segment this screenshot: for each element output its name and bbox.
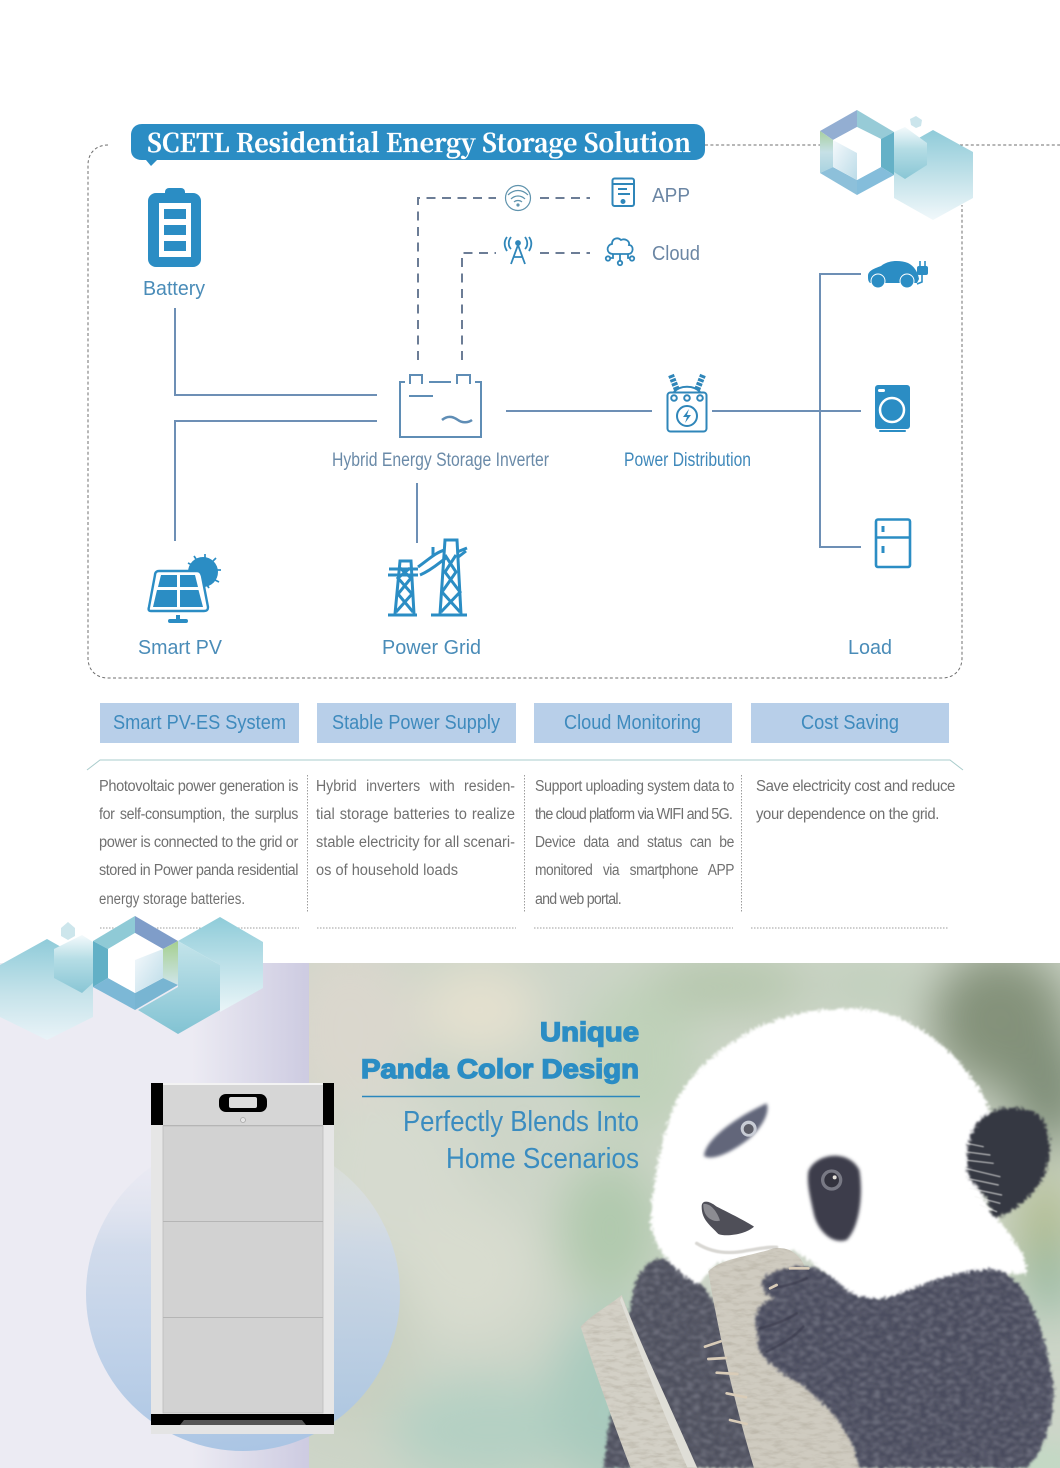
text block: smart pv-es system: energy storage batteries. bbox=[99, 891, 245, 908]
text block: cost saving: your dependence on the grid. bbox=[756, 806, 939, 823]
section dotted rules bbox=[100, 775, 949, 928]
panda ear bbox=[967, 1108, 1050, 1218]
icon: cloud bbox=[606, 238, 634, 265]
label: power distribution: Power Distribution bbox=[624, 450, 751, 471]
product: battery cabinet bbox=[151, 1083, 334, 1434]
paw finger lines bbox=[760, 1278, 807, 1352]
hexagon cluster: lower left bbox=[0, 916, 263, 1040]
feature tab: smart pv-es system bbox=[100, 703, 299, 743]
icon: battery bbox=[148, 188, 201, 267]
feature tab: stable power supply: Stable Power Supply bbox=[332, 712, 500, 734]
title banner: SCETL Residential Energy Storage Solution bbox=[147, 124, 691, 160]
icon: hybrid inverter bbox=[400, 375, 481, 437]
text block: cloud monitoring: Device data and status can be bbox=[535, 834, 734, 851]
feature tab: cost saving bbox=[751, 703, 949, 743]
text block: smart pv-es system: power is connected to the grid or bbox=[99, 834, 298, 851]
label: battery: Battery bbox=[143, 278, 205, 300]
text block: stable power supply: Hybrid inverters with residen- bbox=[316, 778, 515, 795]
panda body and near paw bbox=[756, 1266, 1053, 1468]
feature tab: cloud monitoring: Cloud Monitoring bbox=[564, 712, 701, 734]
panda heading bbox=[361, 1017, 639, 1084]
text block: cloud monitoring bbox=[535, 778, 734, 908]
text block: cloud monitoring: and web portal. bbox=[535, 891, 621, 908]
text block: stable power supply bbox=[316, 778, 515, 879]
text block: cost saving: Save electricity cost and reduce bbox=[756, 778, 955, 795]
panda far eye bbox=[704, 1103, 768, 1158]
panda far arm bbox=[603, 1259, 757, 1468]
battery stage disc bbox=[86, 1137, 400, 1451]
feature tab: stable power supply bbox=[317, 703, 516, 743]
panda subheading: Home Scenarios bbox=[446, 1143, 639, 1175]
panda subheading: Perfectly Blends Into bbox=[403, 1106, 639, 1138]
panda claws bbox=[705, 1268, 808, 1424]
text block: stable power supply: os of household loads bbox=[316, 862, 458, 879]
panda head bbox=[651, 1009, 1027, 1301]
text block: smart pv-es system: for self-consumption, the surplus bbox=[99, 806, 299, 823]
left post bbox=[581, 1295, 697, 1468]
label: power grid: Power Grid bbox=[382, 637, 481, 659]
icon: power distribution bbox=[668, 375, 706, 432]
label: smart pv: Smart PV bbox=[138, 637, 223, 659]
text block: cloud monitoring: the cloud platform via WIFI and 5G. bbox=[535, 806, 732, 823]
panda illustration bbox=[581, 1009, 1053, 1468]
dashed frame bbox=[88, 145, 1060, 678]
icon: power grid pylons bbox=[388, 540, 467, 615]
hexagon cluster: upper right bbox=[820, 110, 973, 220]
text block: cost saving bbox=[756, 778, 955, 823]
ear fringe hairs bbox=[965, 1143, 1002, 1212]
feature tab: cloud monitoring bbox=[534, 703, 732, 743]
label: app: APP bbox=[652, 185, 690, 207]
text block: stable power supply: tial storage batteries to realize bbox=[316, 806, 515, 823]
panda mouth shading bbox=[697, 1243, 777, 1253]
text block: smart pv-es system: Photovoltaic power generation is bbox=[99, 778, 299, 795]
text block: smart pv-es system bbox=[99, 778, 299, 908]
panda heading: Panda Color Design bbox=[361, 1054, 639, 1084]
text block: cloud monitoring: Support uploading system data to bbox=[535, 778, 734, 795]
icon: wifi bbox=[506, 186, 530, 210]
label: cloud: Cloud bbox=[652, 243, 700, 265]
panda nose bbox=[702, 1202, 754, 1235]
icon: washing machine bbox=[875, 385, 910, 432]
text block: smart pv-es system: stored in Power panda residential bbox=[99, 862, 298, 879]
panda near eye bbox=[808, 1156, 861, 1241]
right post bbox=[708, 1248, 860, 1468]
text block: stable power supply: stable electricity for all scenari- bbox=[316, 834, 515, 851]
icon: electric car bbox=[868, 261, 928, 288]
icon: smart pv panel bbox=[149, 554, 221, 623]
feature tab: smart pv-es system: Smart PV-ES System bbox=[113, 712, 286, 734]
connectors: power lines bbox=[175, 274, 861, 547]
icon: antenna bbox=[505, 237, 531, 264]
heading rule bbox=[362, 1096, 640, 1098]
label: load: Load bbox=[848, 637, 892, 659]
icon: app bbox=[612, 178, 634, 206]
connectors: data links bbox=[418, 198, 590, 360]
panda subheading bbox=[403, 1106, 639, 1175]
label: hybrid inverter: Hybrid Energy Storage Inverter bbox=[332, 450, 550, 471]
background: panda photo bbox=[280, 940, 1060, 1468]
icon: refrigerator bbox=[876, 520, 910, 567]
feature tab: cost saving: Cost Saving bbox=[801, 712, 899, 734]
panda heading: Unique bbox=[540, 1017, 639, 1047]
background: lavender panel bbox=[0, 963, 309, 1468]
text block: cloud monitoring: monitored via smartphone APP bbox=[535, 862, 734, 879]
